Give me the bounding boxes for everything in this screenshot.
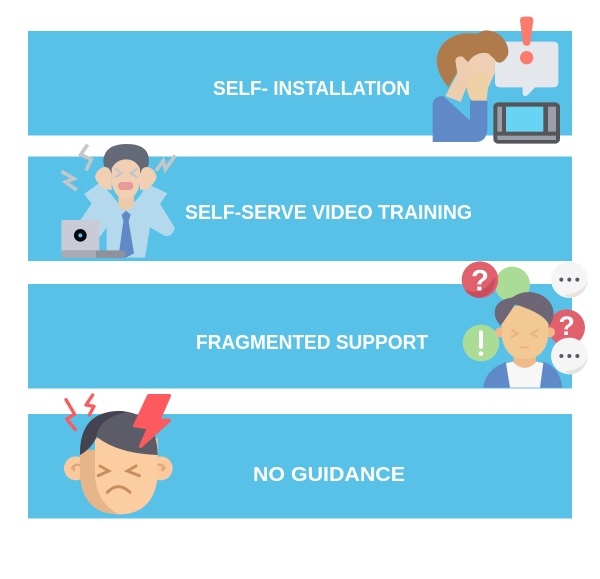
face xyxy=(80,450,158,514)
speech bubble xyxy=(495,42,558,96)
tablet xyxy=(493,102,560,144)
band: self-serve video training xyxy=(28,156,572,261)
mouth xyxy=(107,487,130,492)
laptop xyxy=(61,220,125,258)
icon: man with headache xyxy=(64,395,173,514)
hair xyxy=(103,144,149,173)
neck xyxy=(513,350,536,368)
eyes and mouth xyxy=(512,330,537,347)
tie xyxy=(118,211,134,258)
neck xyxy=(118,195,134,211)
heading: no guidance: NO GUIDANCE xyxy=(253,464,405,486)
panel: self-serve video training xyxy=(28,144,572,261)
face xyxy=(112,159,140,199)
white dots bubble top right xyxy=(551,261,588,298)
band: no guidance xyxy=(28,414,572,518)
green bubble top xyxy=(495,267,530,302)
hair xyxy=(495,292,553,326)
body xyxy=(483,362,562,388)
panel: fragmented support xyxy=(28,261,588,388)
exclamation mark xyxy=(520,17,533,64)
mouth xyxy=(118,182,133,190)
ears xyxy=(495,327,505,337)
panel: self-installation xyxy=(28,17,572,144)
panel: no guidance xyxy=(28,395,572,518)
eyes xyxy=(98,466,139,492)
band: self-installation xyxy=(28,31,572,136)
red question bubble right: ? xyxy=(559,311,575,341)
lightning bolt xyxy=(135,396,169,446)
icon: stressed man at laptop xyxy=(61,144,175,258)
small red sparks xyxy=(66,395,94,430)
lightning bolts xyxy=(61,145,175,190)
red question bubble left: ? xyxy=(471,264,489,297)
person xyxy=(433,30,508,142)
hands xyxy=(95,167,112,190)
heading: fragmented support: FRAGMENTED SUPPORT xyxy=(196,332,428,354)
icon: confused person with question bubbles xyxy=(462,261,588,388)
heading: self-installation: SELF- INSTALLATION xyxy=(213,78,410,100)
shirt xyxy=(80,183,175,258)
eyes xyxy=(115,168,137,177)
hair xyxy=(80,411,158,455)
ears xyxy=(64,456,173,480)
face xyxy=(502,305,548,359)
band: fragmented support xyxy=(28,284,572,388)
green exclamation bubble xyxy=(463,325,499,361)
icon: frustrated person with tablet and alert xyxy=(433,17,560,144)
white dots bubble lower right xyxy=(551,338,588,374)
heading: self-serve video training: SELF-SERVE VIDEO TRAINING xyxy=(185,202,472,224)
